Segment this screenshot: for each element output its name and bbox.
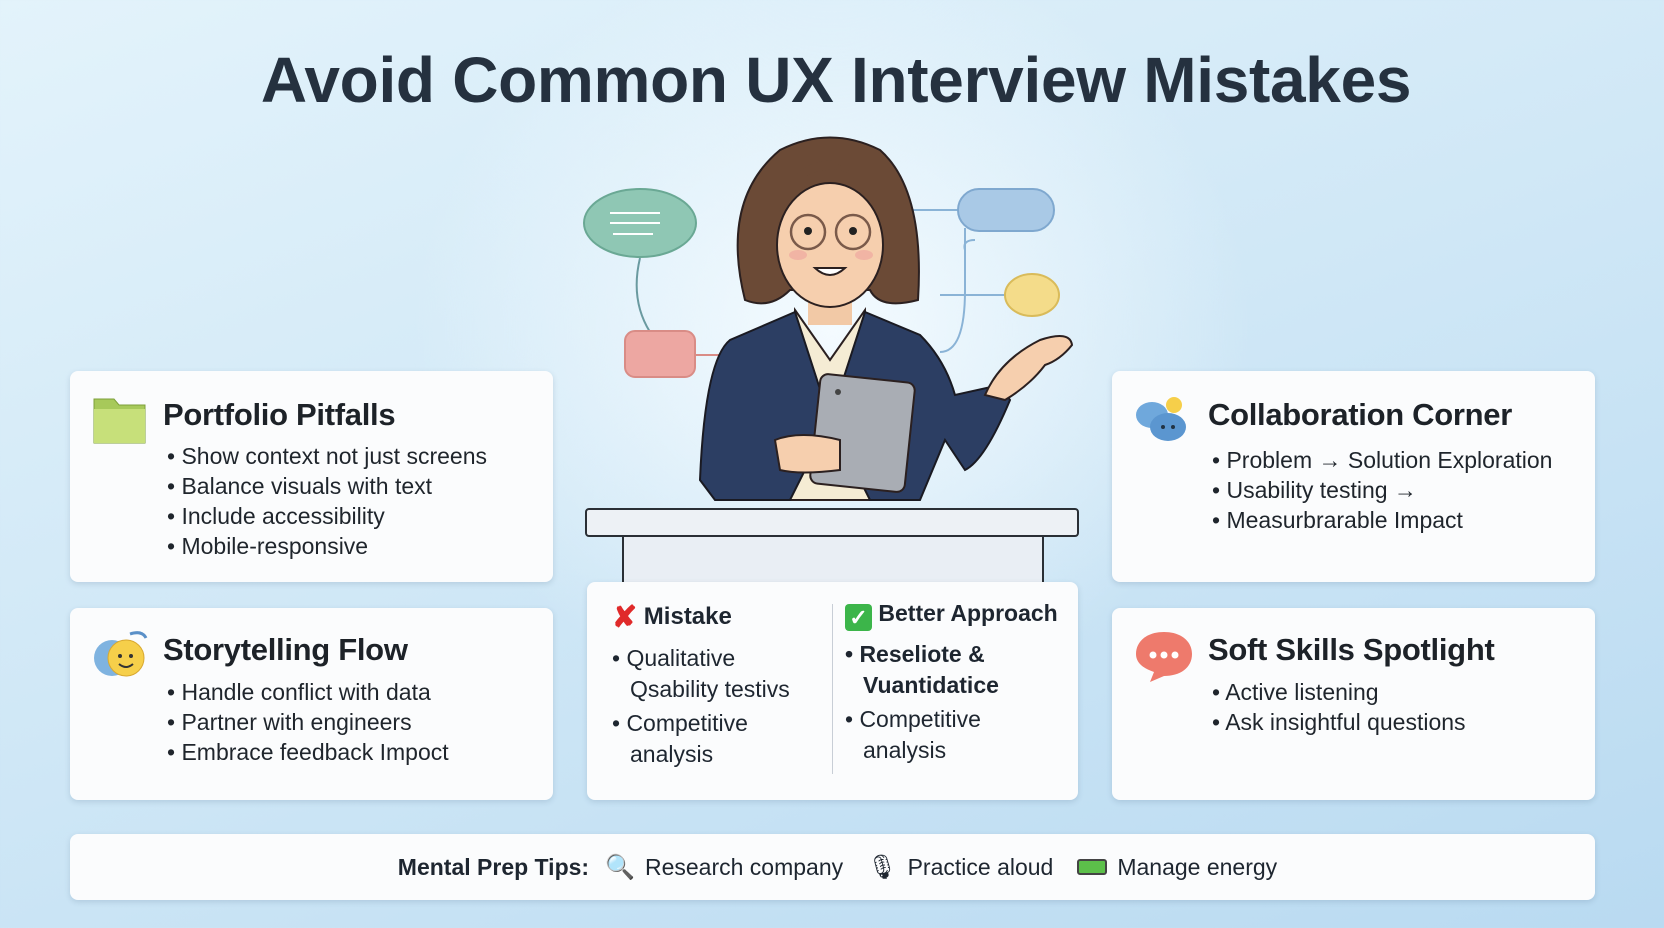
bullets: Problem → Solution Exploration xyxy=(1226,447,1552,473)
bullets: Show context not just screens xyxy=(181,443,487,469)
neck & shirt xyxy=(808,285,852,325)
bullets: Mobile-responsive xyxy=(181,533,368,559)
column: mistake xyxy=(612,601,790,767)
panel: portfolio pitfalls xyxy=(70,371,553,582)
jacket xyxy=(700,312,830,500)
column: mistake: ✘ Mistake xyxy=(612,601,732,634)
column: better approach: • Competitive analysis xyxy=(845,706,981,763)
bullets: Usability testing → xyxy=(1226,477,1417,503)
panel: collaboration corner xyxy=(1112,371,1595,582)
bullets: Ask insightful questions xyxy=(1225,709,1466,735)
bullets xyxy=(168,679,449,765)
heading: Storytelling Flow xyxy=(163,632,408,667)
column: mistake: • Qualitative Qsability testivs xyxy=(612,645,790,702)
title: Avoid Common UX Interview Mistakes xyxy=(261,44,1411,116)
column: better approach: Better Approach xyxy=(878,600,1058,626)
tablet xyxy=(810,373,915,493)
icon: speech bubble xyxy=(1136,632,1192,682)
face xyxy=(777,183,883,307)
bottom bar: mental prep tips: Practice aloud xyxy=(908,854,1053,880)
heading: Collaboration Corner xyxy=(1208,397,1512,432)
panel: mistake vs better approach xyxy=(587,582,1078,800)
bullets: Embrace feedback Impoct xyxy=(181,739,449,765)
column: mistake: • Competitive analysis xyxy=(612,710,748,767)
bullets: Balance visuals with text xyxy=(181,473,432,499)
icon: chat bubbles xyxy=(1136,397,1186,441)
bullets: Include accessibility xyxy=(181,503,385,529)
raised hand xyxy=(985,336,1072,400)
column: better approach: • Reseliote & Vuantidatice xyxy=(845,641,999,698)
bullets: Measurbrarable Impact xyxy=(1226,507,1463,533)
bottom bar: mental prep tips xyxy=(70,834,1595,900)
bullets xyxy=(1212,679,1466,735)
bullets: Active listening xyxy=(1225,679,1379,705)
icon: microphone: 🎙 xyxy=(867,854,898,880)
icon: magnifier: 🔍 xyxy=(605,854,635,880)
podium xyxy=(623,535,1043,585)
bottom bar: mental prep tips: Mental Prep Tips: xyxy=(398,854,589,880)
bullets xyxy=(168,443,487,559)
column: better approach xyxy=(845,600,1058,763)
hair back xyxy=(738,138,919,303)
panel: soft skills spotlight xyxy=(1112,608,1595,800)
heading: Portfolio Pitfalls xyxy=(163,397,395,432)
mind map nodes xyxy=(637,258,650,332)
column: better approach: ✓ xyxy=(849,605,868,630)
bullets: Partner with engineers xyxy=(181,709,412,735)
bottom bar: mental prep tips: Manage energy xyxy=(1117,854,1277,880)
bullets: Handle conflict with data xyxy=(181,679,431,705)
bullets xyxy=(1212,447,1552,533)
bottom bar: mental prep tips: Research company xyxy=(645,854,843,880)
heading: Soft Skills Spotlight xyxy=(1208,632,1494,667)
icon: folder xyxy=(94,398,146,444)
icon: smiley speech xyxy=(94,631,148,676)
panel: storytelling flow xyxy=(70,608,553,800)
icon: battery xyxy=(1077,859,1107,875)
